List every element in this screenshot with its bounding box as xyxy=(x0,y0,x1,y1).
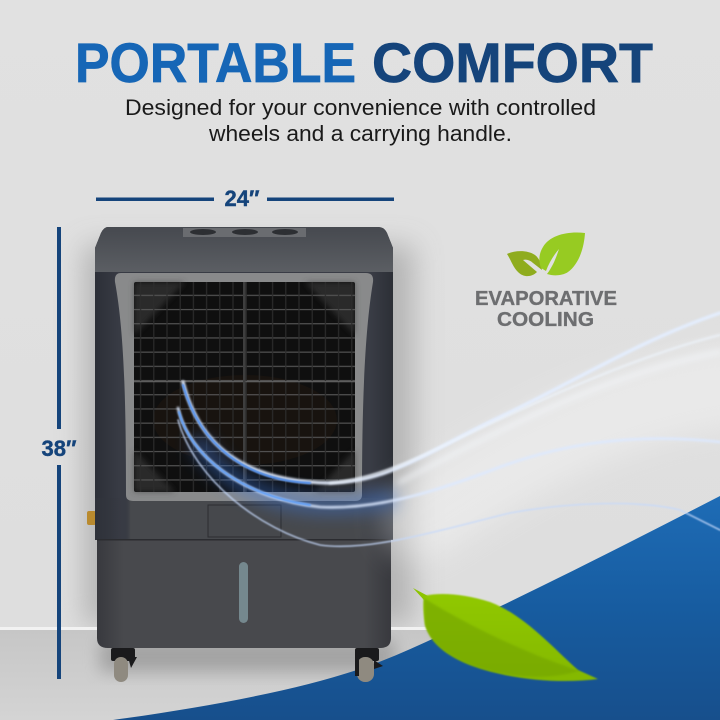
soft white haze xyxy=(420,385,720,520)
main body xyxy=(95,227,393,540)
wind streak lower thin xyxy=(178,420,720,546)
height dimension: 38 inches: 38″ xyxy=(41,436,77,461)
badge text: EVAPORATIVE xyxy=(475,288,617,310)
subtitle xyxy=(125,95,596,146)
grey grille frame xyxy=(115,273,373,501)
control panel xyxy=(183,228,306,237)
title: COMFORT xyxy=(372,31,653,94)
badge text: COOLING xyxy=(497,309,594,331)
width dimension: 24 inches: 24″ xyxy=(224,186,260,211)
blue curved corner shape xyxy=(113,496,720,720)
wind streak middle xyxy=(178,408,720,507)
badge text xyxy=(475,288,617,331)
height dimension: 38 inches xyxy=(41,227,77,679)
lower water tank xyxy=(97,540,391,648)
water level indicator xyxy=(239,562,248,623)
mid body band xyxy=(95,498,393,540)
handle recess xyxy=(208,505,281,537)
airflow swoosh xyxy=(178,313,720,546)
black grille xyxy=(134,282,355,492)
subtitle: Designed for your convenience with controlled xyxy=(125,95,596,120)
falling green leaf xyxy=(413,588,598,681)
evaporative cooling badge xyxy=(475,233,617,331)
bright blue core xyxy=(183,385,310,483)
title xyxy=(75,31,653,94)
wind streaks upper xyxy=(183,313,720,483)
wheels xyxy=(111,648,383,682)
subtitle: wheels and a carrying handle. xyxy=(208,121,512,146)
brass valve xyxy=(87,511,96,525)
width dimension: 24 inches xyxy=(96,186,394,211)
title: PORTABLE xyxy=(75,31,356,94)
icon: green leaves xyxy=(507,233,585,276)
evaporative cooler unit xyxy=(87,227,393,682)
top panel xyxy=(95,227,393,272)
blue glow over unit xyxy=(200,445,388,505)
